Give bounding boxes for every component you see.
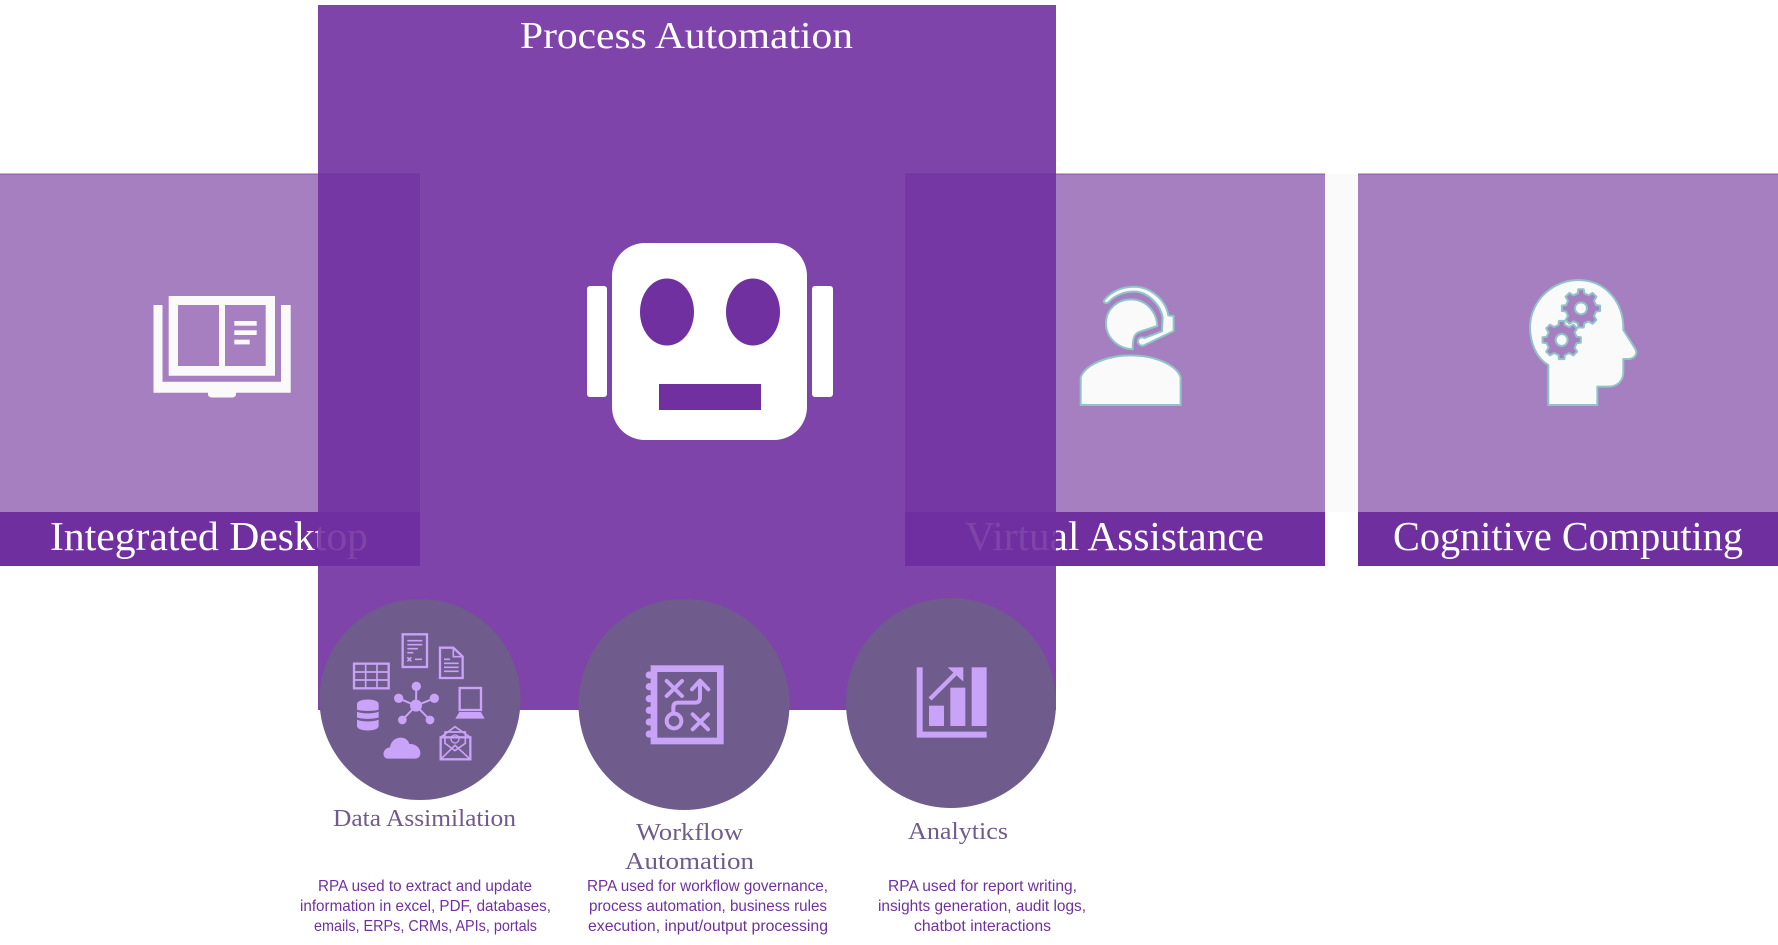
- icon: open book: [154, 296, 291, 398]
- icon: strategy notebook: [646, 669, 720, 741]
- heading: Workflow Automation: Automation: [625, 848, 754, 875]
- heading: Analytics: Analytics: [908, 818, 1008, 845]
- heading: Virtual Assistance: Virtual Assistance: [965, 513, 1264, 559]
- icon: head with gears: [1530, 280, 1636, 405]
- heading: Workflow Automation: Workflow: [636, 819, 743, 846]
- text: Workflow Automation description: execution, input/output processing: [588, 918, 828, 935]
- heading: Integrated Desktop: Integrated Desktop: [50, 513, 368, 559]
- text: Data Assimilation description: RPA used to extract and update: [318, 878, 532, 895]
- heading: Workflow Automation: [625, 819, 754, 875]
- text: Analytics description: chatbot interactions: [914, 918, 1051, 935]
- circle: Analytics: [846, 598, 1056, 808]
- circle: Data Assimilation: [320, 599, 520, 800]
- text: Analytics description: [878, 878, 1086, 935]
- icon: robot face: [587, 243, 833, 440]
- text: Data Assimilation description: [300, 878, 551, 935]
- icon: bar chart with arrow: [917, 667, 987, 738]
- panel: Process Automation: [318, 5, 1056, 710]
- circle: Workflow Automation: [578, 599, 790, 810]
- icon: data sources: [354, 634, 485, 759]
- text: Analytics description: insights generation, audit logs,: [878, 898, 1086, 915]
- text: Workflow Automation description: [587, 878, 828, 935]
- heading: Cognitive Computing: Cognitive Computing: [1393, 513, 1743, 559]
- heading: Process Automation: Process Automation: [520, 15, 853, 57]
- text: Workflow Automation description: RPA used for workflow governance,: [587, 878, 828, 895]
- text: Data Assimilation description: emails, ERPs, CRMs, APIs, portals: [314, 918, 537, 935]
- heading: Data Assimilation: Data Assimilation: [333, 805, 516, 832]
- icon: headset agent: [1081, 287, 1181, 405]
- text: Analytics description: RPA used for report writing,: [888, 878, 1077, 895]
- panel: Cognitive Computing: [1358, 174, 1778, 566]
- panel: Integrated Desktop: [0, 174, 420, 566]
- panel: Virtual Assistance: [905, 174, 1325, 566]
- text: Data Assimilation description: information in excel, PDF, databases,: [300, 898, 551, 915]
- text: Workflow Automation description: process automation, business rules: [589, 898, 827, 915]
